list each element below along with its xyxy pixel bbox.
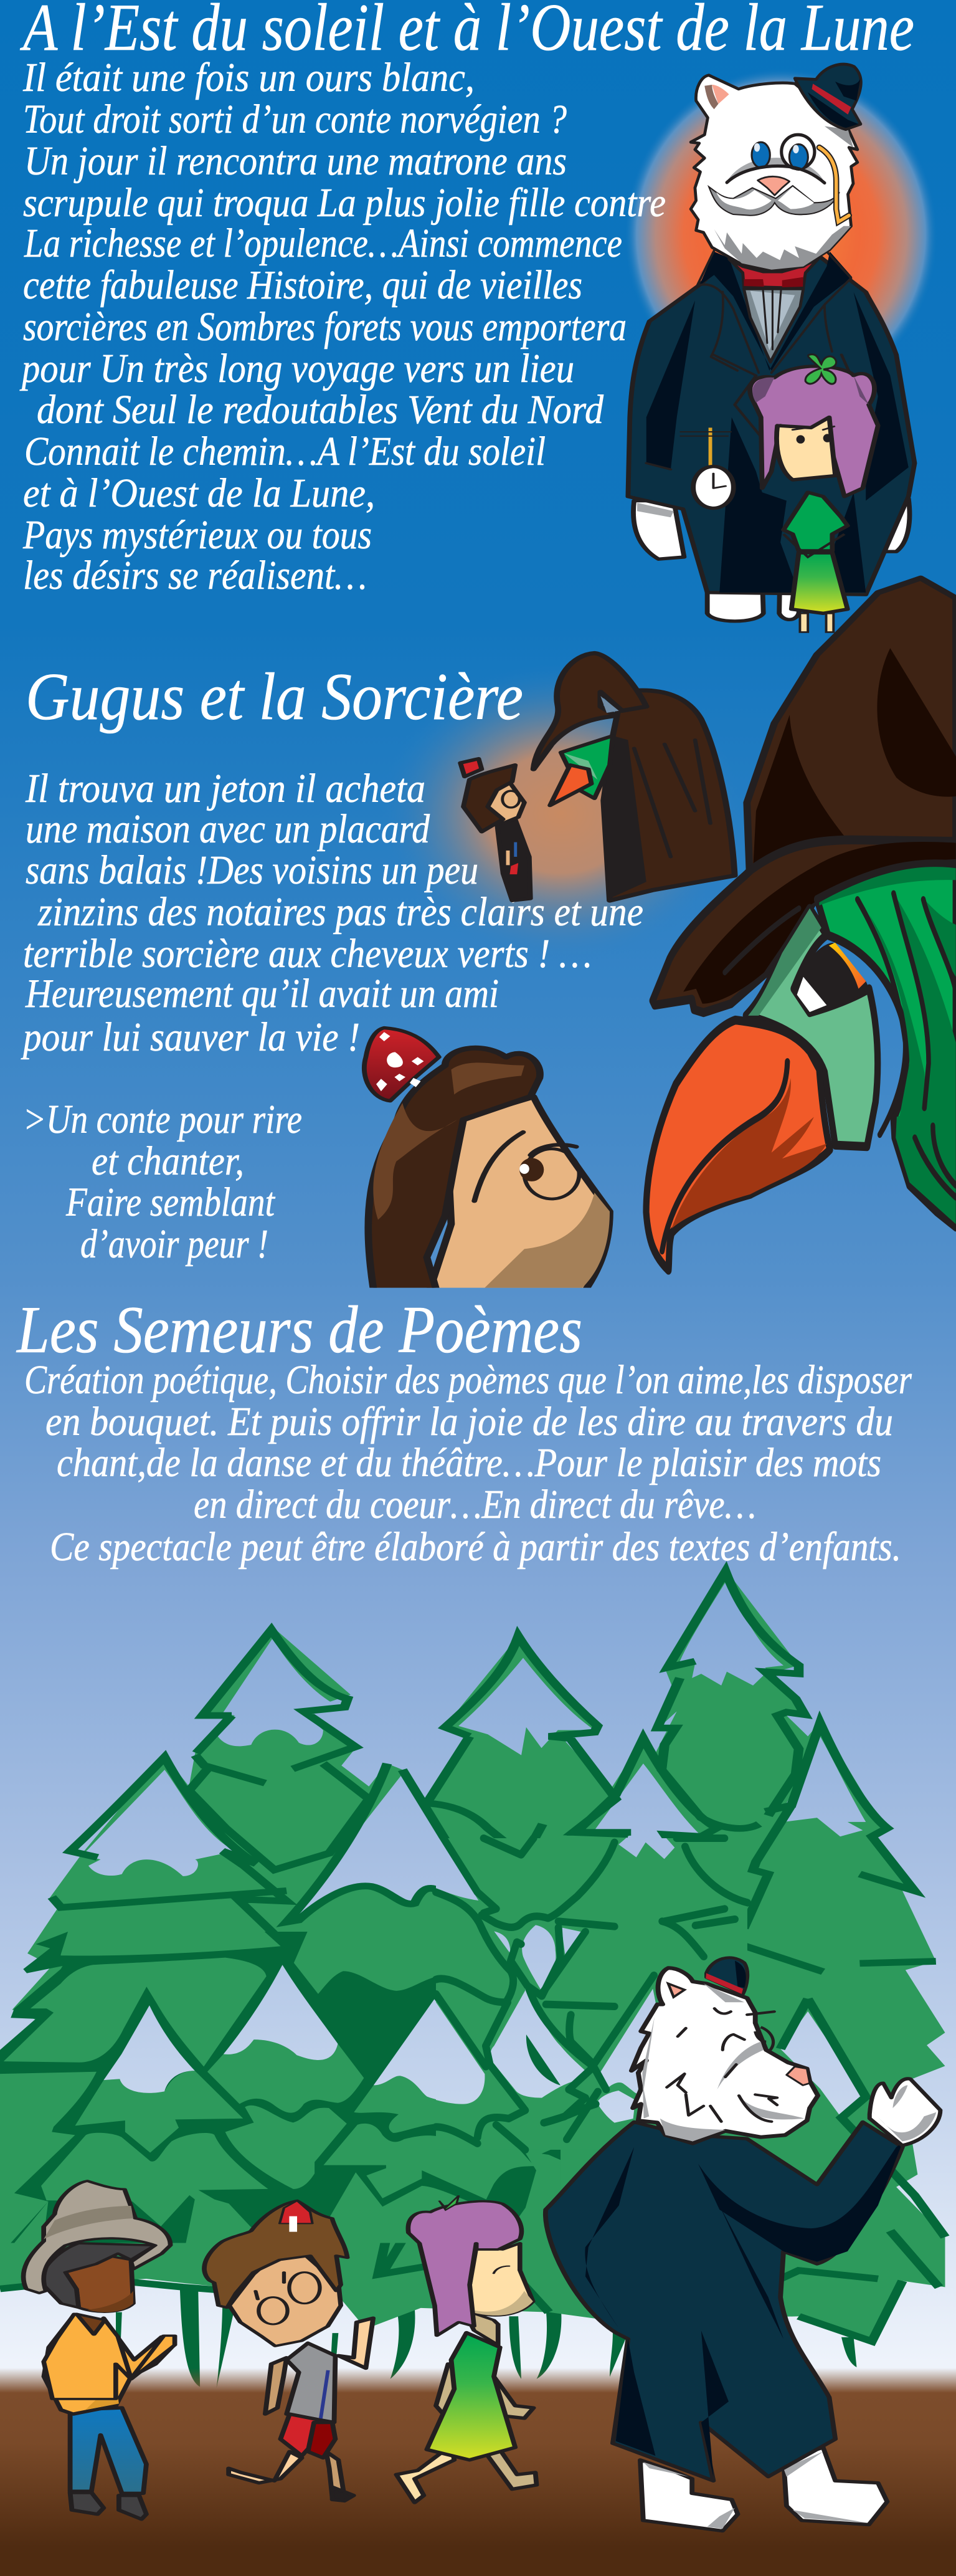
green of the central trees <box>436 1838 747 2150</box>
text block: story of the white bear: Un jour il rencontra une matrone ans <box>24 138 567 184</box>
ground <box>0 2368 956 2576</box>
text block: Gugus story: terrible sorcière aux cheveux verts ! … <box>23 931 592 976</box>
text block: story of the white bear: les désirs se réalisent… <box>23 553 367 598</box>
green fill of the left trees <box>4 1932 561 2243</box>
text block: story of the white bear: dont Seul le redoutables Vent du Nord <box>37 387 604 432</box>
text block: tagline: Faire semblant <box>65 1180 275 1225</box>
illustration: walking girl with purple hair <box>396 2195 537 2502</box>
text block: Gugus story <box>21 766 643 1060</box>
illustration: big witch portrait with crow beak nose <box>646 578 956 1271</box>
text block: tagline: >Un conte pour rire <box>23 1097 302 1142</box>
text block: story of the white bear: cette fabuleuse Histoire, qui de vieilles <box>23 262 582 308</box>
text block: Gugus story: zinzins des notaires pas très clairs et une <box>37 889 643 935</box>
text block: story of the white bear: sorcières en Sombres forets vous emportera <box>23 304 627 350</box>
text block: tagline: d’avoir peur ! <box>80 1221 268 1267</box>
halo behind the white bear <box>624 68 938 402</box>
halo behind the small witch scene <box>380 664 741 963</box>
illustration: man in grey hat and yellow jacket <box>24 2181 175 2519</box>
illustration: pine forest <box>0 1570 945 2388</box>
text block: story of the white bear: et à l’Ouest de la Lune, <box>23 470 375 516</box>
four-leaf clover in the girl's hair <box>805 355 836 384</box>
text block: story of the white bear: scrupule qui troqua La plus jolie fille contre <box>23 180 666 226</box>
text block: tagline <box>23 1097 302 1267</box>
dark base of the left trees <box>0 1932 561 2243</box>
illustration: white bear in a coat with the girl <box>628 64 914 632</box>
text block: tagline: et chanter, <box>92 1138 244 1184</box>
text block: story of the white bear: pour Un très long voyage vers un lieu <box>19 346 574 391</box>
illustration: running Gugus <box>204 2201 373 2501</box>
text block: Gugus story: Heureusement qu’il avait un ami <box>25 971 499 1016</box>
text block: story of the white bear: Connait le chemin…A l’Est du soleil <box>24 429 546 474</box>
text block: Gugus story: pour lui sauver la vie ! <box>21 1014 360 1060</box>
text block: Gugus story: sans balais !Des voisins un peu <box>26 847 478 893</box>
title: Gugus et la Sorcière: Gugus et la Sorcière <box>26 660 523 734</box>
illustration: polar bear in dark coat waving <box>546 1958 940 2531</box>
text block: story of the white bear: Il était une fois un ours blanc, <box>22 55 475 100</box>
text block: Gugus story: Il trouva un jeton il acheta <box>25 766 425 811</box>
text block: Les Semeurs description: en direct du coeur…En direct du rêve… <box>194 1482 756 1527</box>
dark green tree outlines <box>0 1572 945 2341</box>
text block: story of the white bear: La richesse et l’opulence…Ainsi commence <box>24 221 622 266</box>
text block: story of the white bear <box>19 55 666 598</box>
illustration: small witch facing small Gugus <box>460 653 735 900</box>
mushroom on Gugus's head <box>364 1028 439 1101</box>
illustration: big Gugus head with mushroom <box>364 1028 610 1299</box>
sky through the central trees <box>436 1838 674 2123</box>
dark green lines of the central trees <box>436 1836 747 2150</box>
text block: Gugus story: une maison avec un placard <box>26 806 430 852</box>
text block: story of the white bear: Pays mystérieux ou tous <box>22 512 372 558</box>
text block: Les Semeurs description <box>24 1357 912 1570</box>
title: Les Semeurs de Poèmes: Les Semeurs de Poèmes <box>16 1293 582 1367</box>
text block: Les Semeurs description: en bouquet. Et puis offrir la joie de les dire au travers du <box>45 1399 893 1444</box>
sky showing through the snowy tree tops <box>82 1582 866 2118</box>
text block: story of the white bear: Tout droit sorti d’un conte norvégien ? <box>23 97 567 142</box>
tree drips and trunks <box>116 2287 856 2388</box>
forest green mass <box>0 1570 945 2341</box>
sky through the left tree tops <box>103 1965 485 2102</box>
